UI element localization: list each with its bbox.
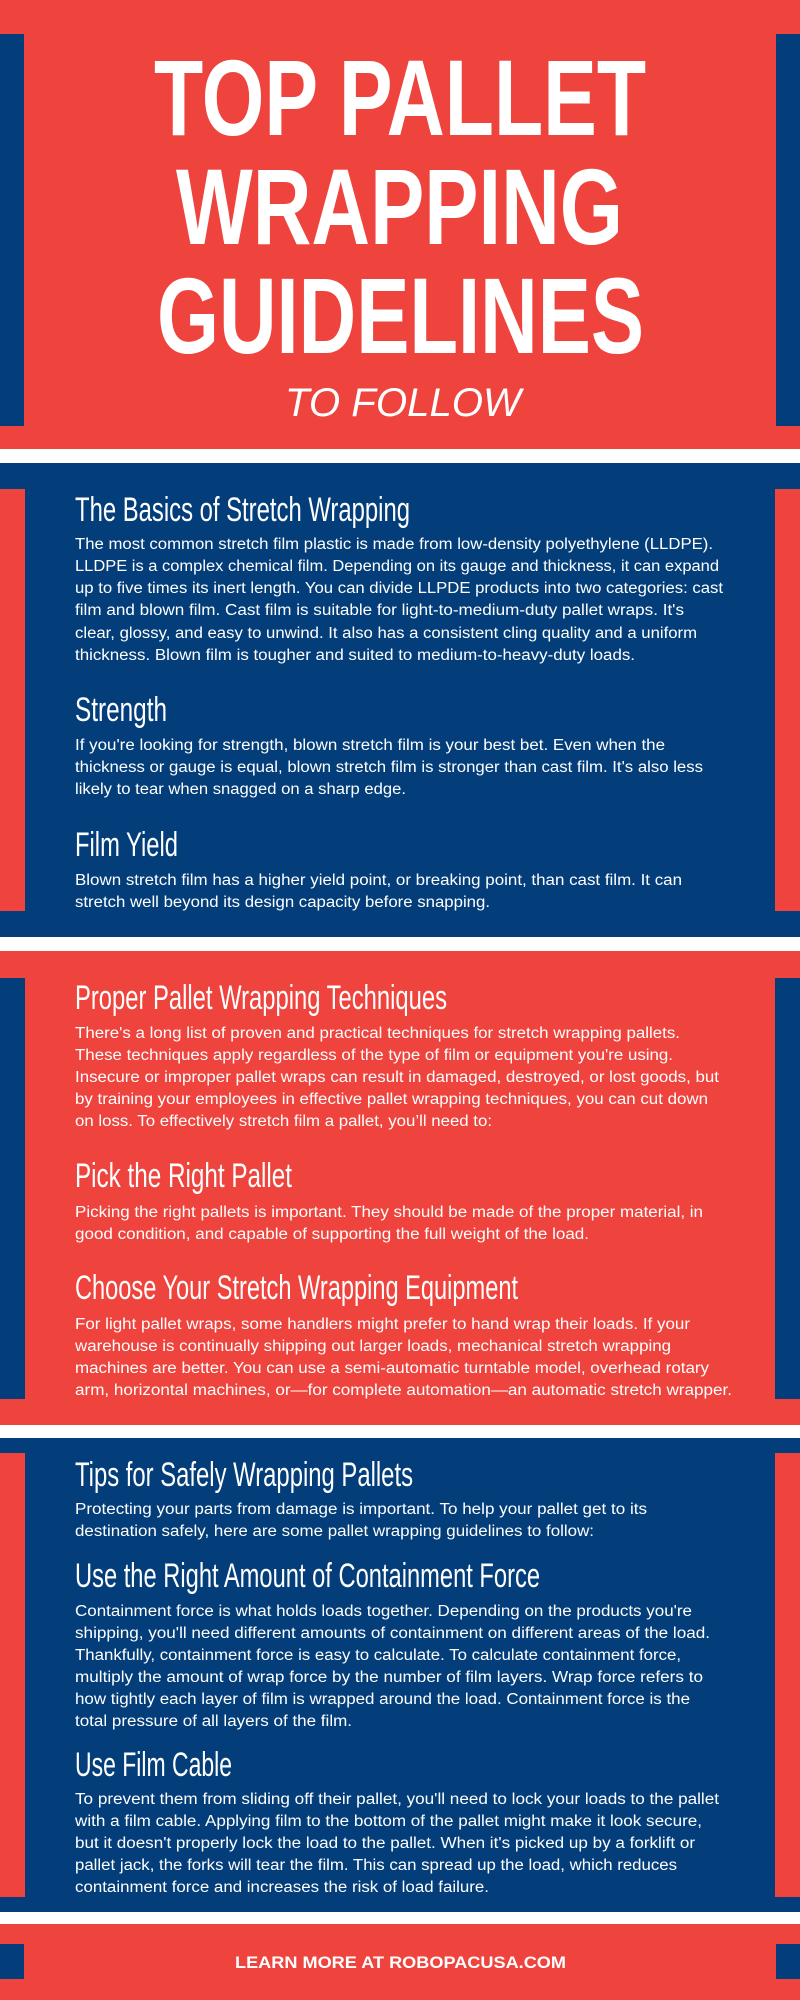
text: tips: destination safely, here are some pallet wrapping guidelines to follow:: [75, 1523, 594, 1540]
text: film cable: To prevent them from sliding off their pallet, you'll need to lock your loads to the pallet: [75, 1791, 720, 1808]
title: TOP PALLET: [154, 37, 646, 158]
title: GUIDELINES: [157, 255, 644, 376]
text: equipment: machines are better. You can use a semi-automatic turntable model, overhead rotary: [75, 1360, 709, 1377]
text: film cable: pallet jack, the forks will tear the film. This can spread up the load, which reduces: [75, 1857, 677, 1874]
subtitle: TO FOLLOW: [285, 381, 524, 425]
text: techniques: These techniques apply regardless of the type of film or equipment you're using.: [75, 1047, 673, 1064]
text: equipment: warehouse is continually shipping out larger loads, mechanical stretch wrapping: [74, 1338, 671, 1355]
panel: safety tips: [0, 1438, 800, 1912]
text: techniques: [75, 1025, 720, 1130]
text: containment force: [75, 1603, 710, 1730]
text: pick pallet: [75, 1204, 703, 1243]
text: containment force: how tightly each layer of film is wrapped around the load. Containment force is the: [75, 1691, 690, 1708]
text: strength: If you're looking for strength, blown stretch film is your best bet. Even when the: [75, 737, 665, 754]
heading: pick pallet: Pick the Right Pallet: [75, 1157, 292, 1195]
text: film cable: [74, 1791, 720, 1896]
text: film cable: but it doesn't properly lock the load to the pallet. When it's picked up by a forklift or: [75, 1835, 695, 1852]
text: strength: [75, 737, 703, 798]
panel: stretch wrapping basics: [0, 463, 800, 937]
text: basics: film and blown film. Cast film is suitable for light-to-medium-duty pallet wraps. It's: [75, 602, 684, 619]
text: basics: thickness. Blown film is tougher and suited to medium-to-heavy-duty loads.: [75, 647, 635, 664]
text: basics: [75, 536, 724, 664]
text: containment force: Thankfully, containment force is easy to calculate. To calculate containment force,: [75, 1647, 681, 1664]
text: film yield: Blown stretch film has a higher yield point, or breaking point, than cast film. It can: [75, 872, 682, 889]
text: containment force: multiply the amount of wrap force by the number of film layers. Wrap force refers to: [75, 1669, 703, 1686]
footer link text: LEARN MORE AT ROBOPACUSA.COM: [235, 1953, 566, 1972]
header panel: [0, 0, 800, 449]
text: film yield: [75, 872, 682, 911]
footer: [0, 1924, 800, 2000]
text: basics: LLDPE is a complex chemical film. Depending on its gauge and thickness, it can expand: [75, 558, 719, 575]
title: WRAPPING: [176, 146, 623, 267]
text: pick pallet: good condition, and capable of supporting the full weight of the load.: [75, 1226, 589, 1243]
text: techniques: by training your employees in effective pallet wrapping techniques, you can cut down: [75, 1091, 708, 1108]
text: basics: The most common stretch film plastic is made from low-density polyethylene (LLDPE).: [75, 536, 713, 553]
text: techniques: on loss. To effectively stretch film a pallet, you’ll need to:: [75, 1113, 492, 1130]
heading: strength: Strength: [75, 691, 167, 729]
heading: film cable: Use Film Cable: [75, 1746, 232, 1784]
heading: equipment: Choose Your Stretch Wrapping Equipment: [75, 1269, 518, 1307]
text: containment force: shipping, you'll need different amounts of containment on different areas of the load.: [75, 1625, 710, 1642]
text: equipment: [74, 1316, 732, 1399]
text: tips: Protecting your parts from damage is important. To help your pallet get to its: [75, 1501, 647, 1518]
panel: techniques: [0, 951, 800, 1425]
text: strength: thickness or gauge is equal, blown stretch film is stronger than cast film. It's also less: [75, 759, 703, 776]
text: strength: likely to tear when snagged on a sharp edge.: [75, 781, 406, 798]
text: containment force: total pressure of all layers of the film.: [75, 1713, 352, 1730]
heading: film yield: Film Yield: [75, 826, 178, 864]
text: containment force: Containment force is what holds loads together. Depending on the products you're: [75, 1603, 692, 1620]
text: equipment: For light pallet wraps, some handlers might prefer to hand wrap their loads. If your: [75, 1316, 690, 1333]
text: basics: up to five times its inert length. You can divide LLPDE products into two categories: cast: [75, 580, 724, 597]
heading: techniques: Proper Pallet Wrapping Techniques: [75, 979, 447, 1017]
heading: containment force: Use the Right Amount of Containment Force: [75, 1557, 540, 1595]
text: equipment: arm, horizontal machines, or—for complete automation—an automatic stretch wrapper.: [75, 1382, 732, 1399]
text: film cable: containment force and increases the risk of load failure.: [75, 1879, 489, 1896]
heading: basics: The Basics of Stretch Wrapping: [75, 491, 410, 529]
text: techniques: There's a long list of proven and practical techniques for stretch wrapping pallets.: [75, 1025, 680, 1042]
text: film cable: with a film cable. Applying film to the bottom of the pallet might make it look secure,: [74, 1813, 702, 1830]
text: film yield: stretch well beyond its design capacity before snapping.: [75, 894, 490, 911]
heading: tips: Tips for Safely Wrapping Pallets: [75, 1456, 413, 1494]
title: [154, 37, 646, 376]
text: pick pallet: Picking the right pallets is important. They should be made of the proper material, in: [75, 1204, 703, 1221]
text: tips: [75, 1501, 647, 1540]
text: basics: clear, glossy, and easy to unwind. It also has a consistent cling quality and a uniform: [75, 625, 697, 642]
text: techniques: Insecure or improper pallet wraps can result in damaged, destroyed, or lost goods, but: [75, 1069, 720, 1086]
